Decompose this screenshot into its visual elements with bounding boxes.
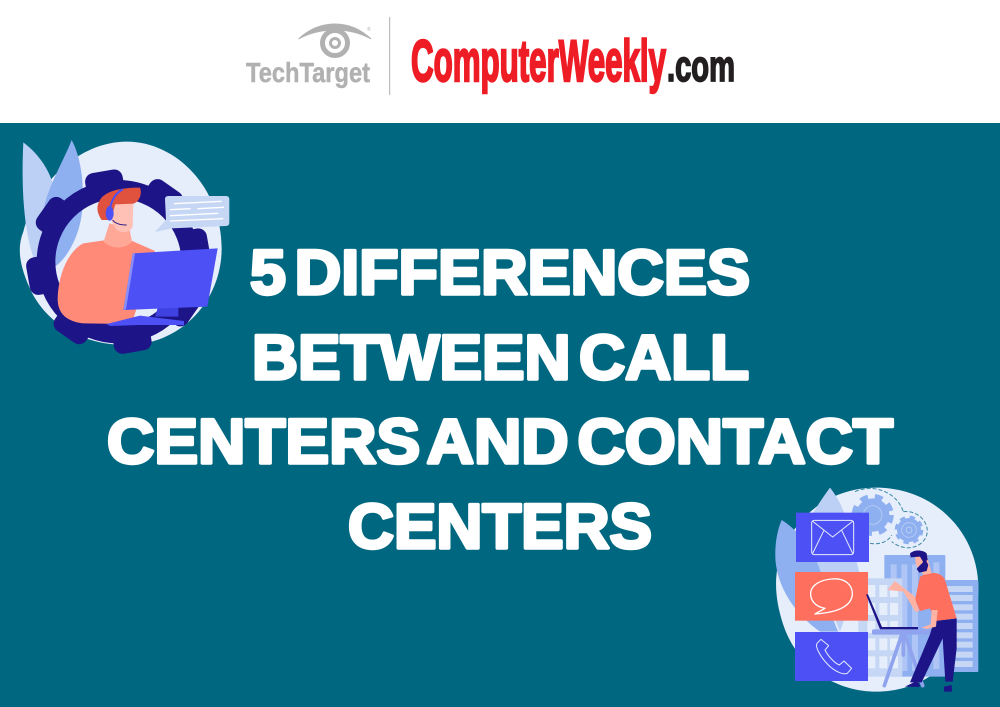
header band — [0, 0, 1000, 123]
panel: email — [796, 513, 869, 562]
legs — [910, 618, 957, 682]
icon: envelope — [812, 520, 854, 555]
illustration: call center agent — [20, 140, 229, 355]
leaf: front — [775, 520, 838, 632]
leaf: back — [810, 488, 860, 632]
face — [112, 202, 133, 232]
hair — [97, 188, 141, 220]
leaf: right — [42, 140, 83, 267]
title: CENTERS — [348, 492, 652, 562]
agent — [58, 188, 155, 324]
desk with laptop — [866, 594, 935, 686]
icon: speech bubble — [811, 579, 852, 614]
person standing — [887, 550, 957, 692]
icon: phone handset — [817, 639, 852, 674]
building: middle — [884, 555, 945, 677]
title: BETWEEN CALL — [252, 323, 749, 393]
arm — [887, 581, 919, 612]
gear — [25, 168, 212, 355]
panel: chat — [795, 572, 868, 621]
panel: phone — [795, 632, 868, 681]
title: 5 DIFFERENCES — [250, 238, 750, 308]
icon: TechTarget eye: ® — [367, 26, 371, 33]
logo: ComputerWeekly.com — [411, 29, 735, 94]
dashed connector rings — [855, 488, 927, 548]
torso — [58, 240, 155, 324]
buildings — [858, 555, 978, 677]
title: CENTERS AND CONTACT — [107, 407, 893, 477]
headset — [106, 189, 127, 225]
wordmark: ComputerWeekly: ComputerWeekly — [411, 29, 666, 94]
shoes — [905, 681, 952, 692]
logo divider — [389, 17, 390, 95]
hair — [910, 550, 928, 562]
computer monitor — [107, 248, 218, 326]
title — [107, 238, 893, 562]
leaf: left — [23, 142, 57, 268]
logo: TechTarget — [246, 24, 371, 88]
beard — [917, 558, 928, 573]
building: left — [858, 578, 902, 677]
gears — [854, 488, 927, 548]
neck — [104, 223, 132, 247]
desk top — [872, 629, 935, 635]
head — [915, 555, 932, 575]
wordmark: .com: .com — [667, 42, 735, 91]
wordmark: TechTarget: TechTarget — [246, 57, 370, 88]
desk legs — [884, 635, 923, 686]
speech bubble — [155, 196, 229, 232]
illustration: omnichannel contact center — [775, 488, 978, 692]
building: right — [945, 580, 978, 672]
torso — [915, 573, 957, 621]
background blob — [20, 142, 222, 345]
background blob — [776, 488, 978, 692]
laptop — [866, 594, 918, 629]
